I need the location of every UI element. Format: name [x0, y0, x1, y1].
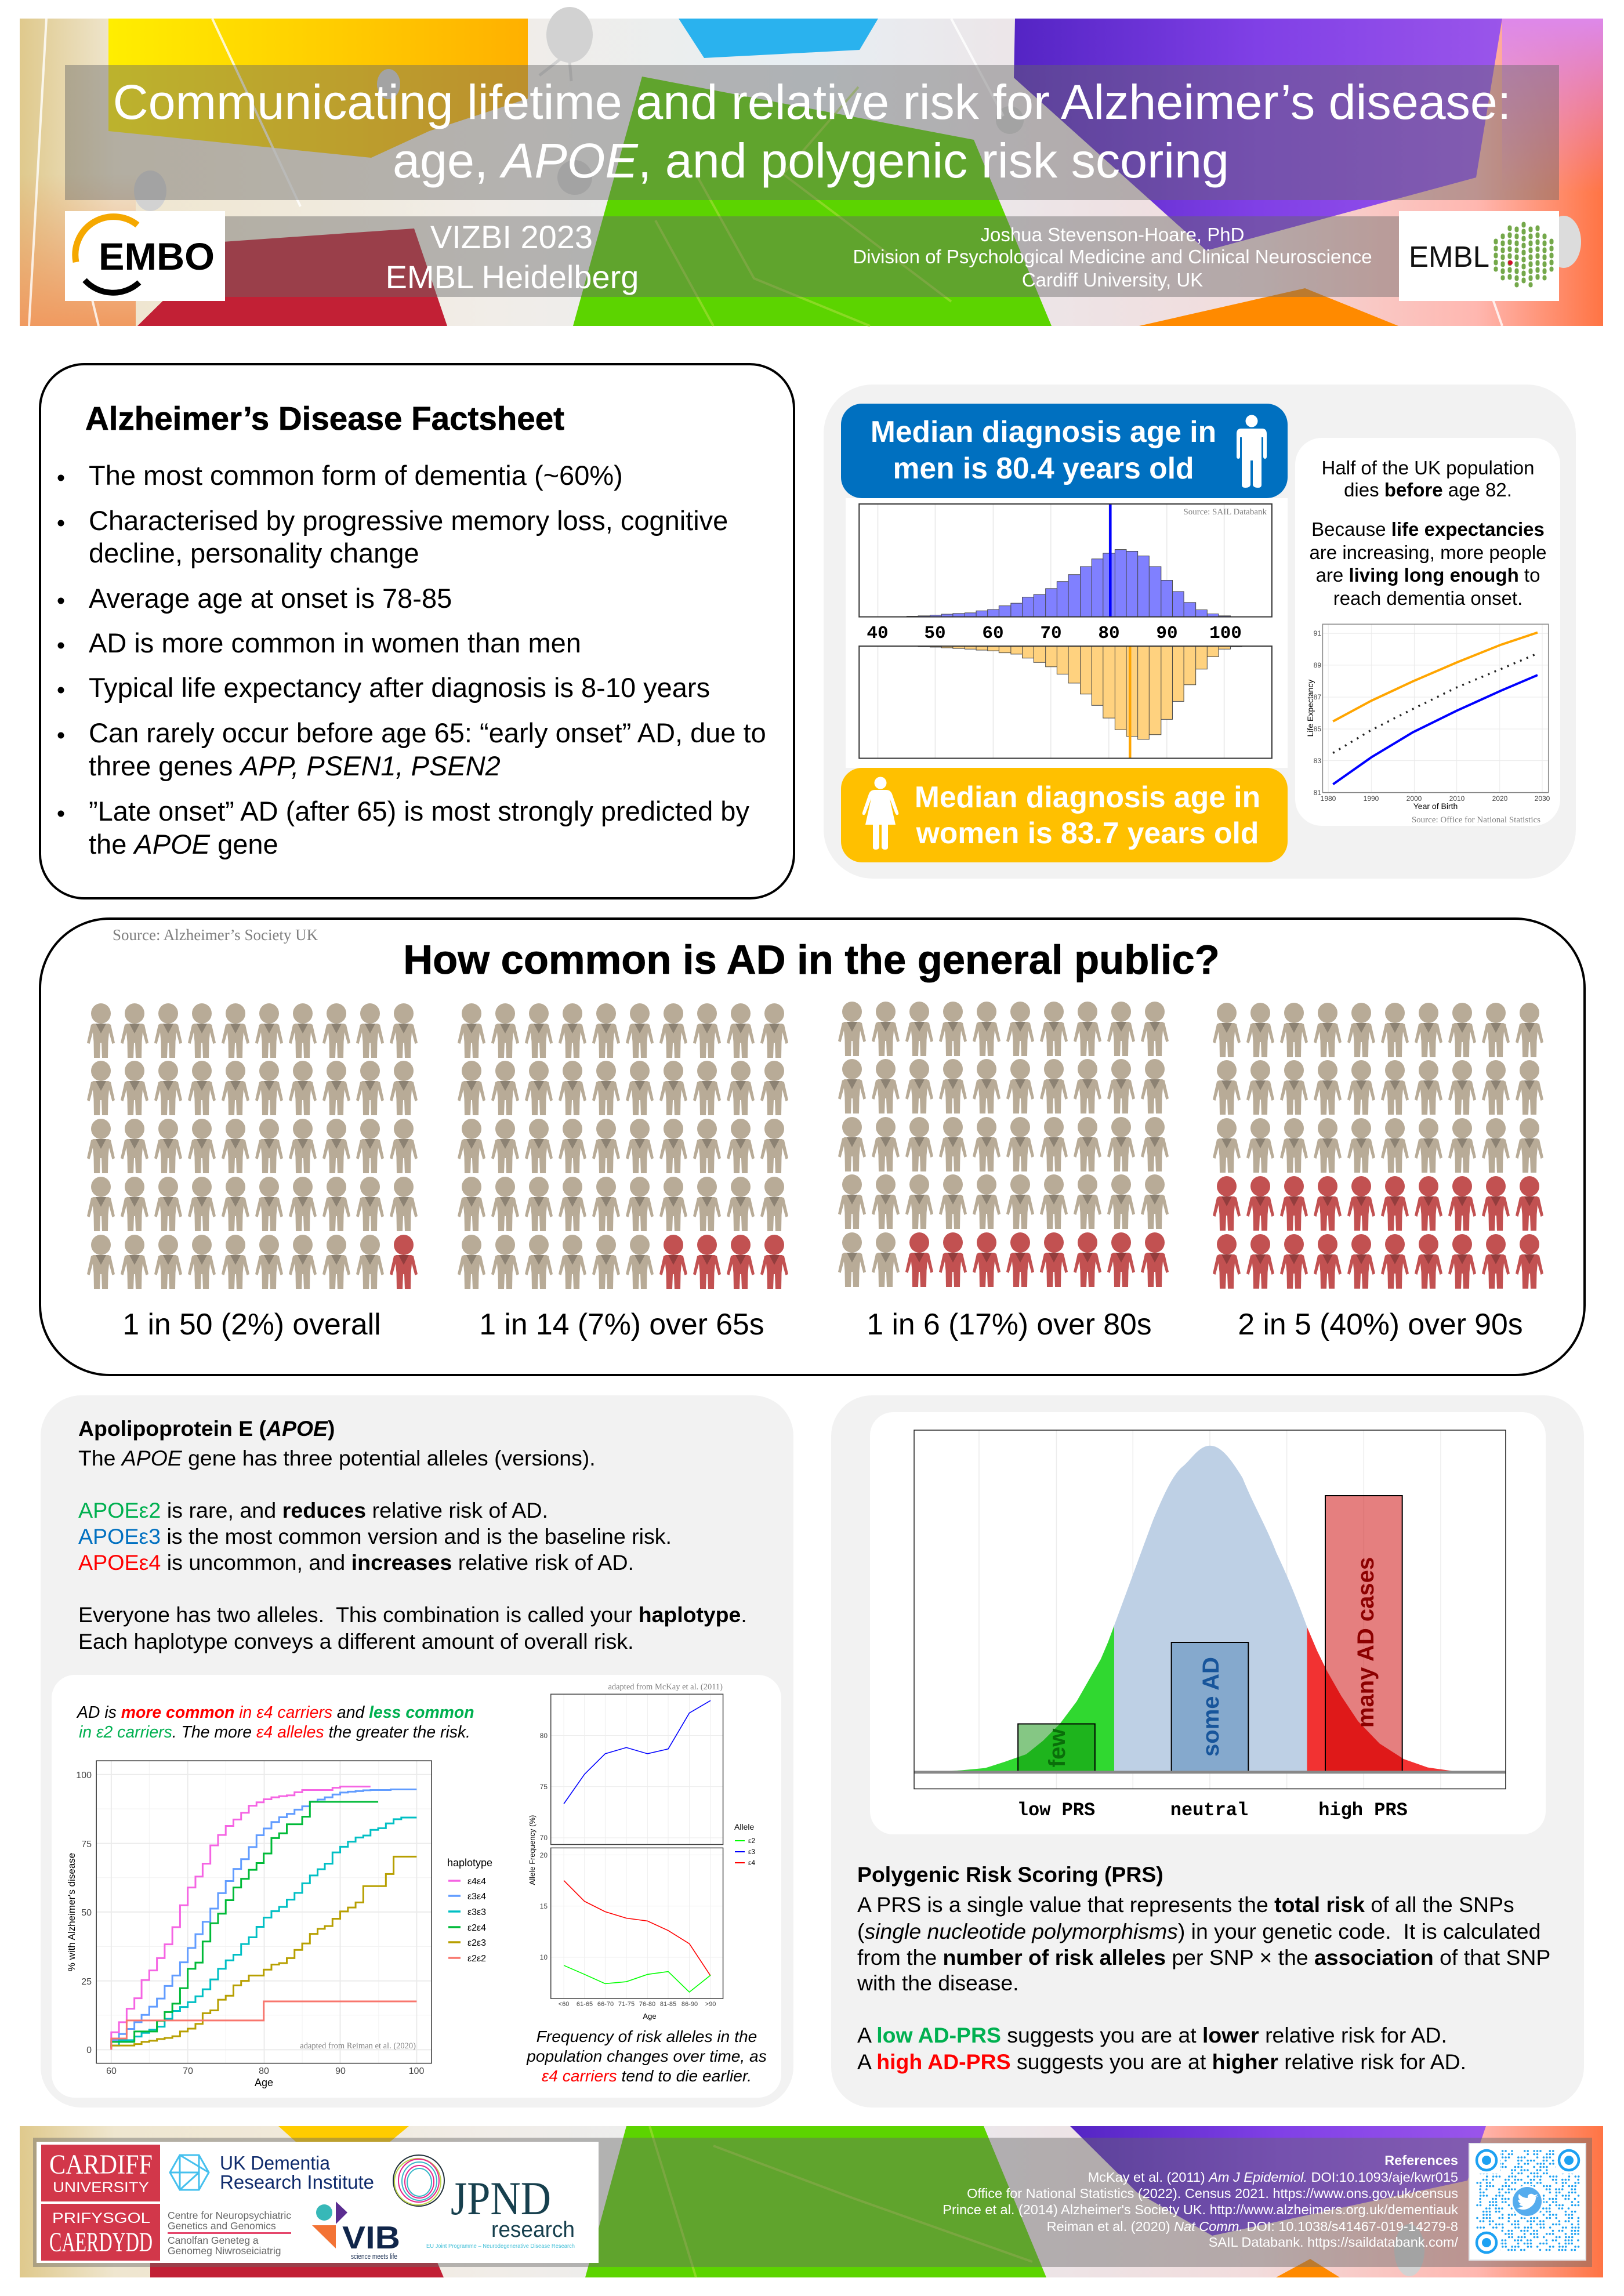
chart: PRS distribution: neutral	[1170, 1800, 1248, 1821]
chart caption	[526, 2027, 767, 2085]
chart lead text: in ε2 carriers. The more ε4 alleles the greater the risk.	[79, 1723, 470, 1742]
title band	[65, 65, 1559, 200]
APOE explanation text: APOEε4 is uncommon, and increases relative risk of AD.	[78, 1550, 634, 1575]
logo: EMBL	[1399, 211, 1559, 301]
chart: life expectancy by year of birth: 2030	[1535, 795, 1550, 803]
header background artwork	[20, 7, 1603, 326]
callout: women: women is 83.7 years old	[916, 816, 1259, 850]
references: McKay et al. (2011) Am J Epidemiol. DOI:10.1093/aje/kwr015	[1088, 2170, 1458, 2185]
factsheet bullet list	[58, 460, 766, 859]
QR code with Twitter logo	[1469, 2143, 1586, 2260]
logo: Centre for Neuropsychiatric Genetics	[168, 2210, 291, 2257]
factsheet bullet list: AD is more common in women than men	[89, 627, 581, 658]
APOE explanation text: Everyone has two alleles. This combination is called your haplotype.	[78, 1602, 747, 1627]
footer background artwork	[20, 2126, 1603, 2277]
logo: JPND research: JPND	[451, 2172, 551, 2225]
chart: life expectancy by year of birth: 1990	[1364, 795, 1379, 803]
callout: men	[841, 404, 1288, 498]
age axis labels: 100	[1209, 623, 1242, 644]
chart: cumulative AD by haplotype: 100	[409, 2066, 424, 2076]
legend: haplotype: ε2ε4	[467, 1923, 486, 1933]
chart: PRS distribution	[914, 1430, 1506, 1821]
age axis labels: 90	[1156, 623, 1178, 644]
footer banner	[20, 2126, 1603, 2277]
references: References	[1384, 2153, 1458, 2168]
chart: allele frequency by age: 20	[540, 1851, 548, 1859]
chart: allele frequency by age: 76-80	[639, 2001, 655, 2008]
PRS explanation text: from the number of risk alleles per SNP × the association of that SNP	[857, 1945, 1550, 1969]
factsheet bullet list: Average age at onset is 78-85	[89, 583, 452, 614]
logo: UK Dementia Research Institute	[170, 2152, 374, 2193]
logo: Centre for Neuropsychiatric Genetics: Genomeg Niwroseiciatrig	[168, 2245, 281, 2257]
chart lead text	[76, 1703, 474, 1742]
age axis labels: 80	[1098, 623, 1120, 644]
subtitle band	[65, 216, 1559, 297]
chart: life expectancy by year of birth: 1980	[1321, 795, 1336, 803]
title: Communicating lifetime and relative risk for Alzheimer’s disease:	[113, 75, 1511, 129]
white chart card	[870, 1412, 1546, 1834]
panel: life expectancy	[1295, 438, 1560, 826]
legend: allele: Allele	[734, 1822, 754, 1831]
references: Office for National Statistics (2022). Census 2021. https://www.ons.gov.uk/census	[967, 2186, 1458, 2201]
chart: cumulative AD by haplotype: 100	[76, 1771, 92, 1780]
legend: haplotype: ε3ε4	[467, 1892, 486, 1902]
logos panel	[37, 2142, 599, 2263]
PRS explanation text: with the disease.	[857, 1971, 1019, 1995]
chart: allele frequency by age: 15	[540, 1902, 548, 1910]
logo: Cardiff University: CARDIFF	[49, 2149, 153, 2180]
references: Prince et al. (2014) Alzheimer's Society UK. http://www.alzheimers.org.uk/dementiauk	[942, 2202, 1458, 2217]
logo: Cardiff University: PRIFYSGOL	[52, 2210, 150, 2226]
panel: APOE	[41, 1395, 793, 2108]
chart: female diagnosis histogram	[859, 646, 1272, 759]
panel: factsheet	[40, 364, 794, 898]
PRS explanation text	[857, 1862, 1550, 2074]
chart: allele frequency by age: Age	[643, 2012, 657, 2021]
factsheet heading: Alzheimer’s Disease Factsheet	[85, 400, 564, 437]
PRS explanation text: (single nucleotide polymorphisms) in your genetic code. It is calculated	[857, 1919, 1540, 1943]
legend: haplotype: ε2ε3	[467, 1938, 486, 1948]
legend: haplotype: ε4ε4	[467, 1877, 486, 1887]
panel box	[40, 919, 1585, 1375]
pictogram: 1 in 50 overall	[87, 1003, 418, 1289]
APOE explanation text: The APOE gene has three potential alleles (versions).	[78, 1446, 596, 1470]
PRS explanation text: A PRS is a single value that represents the total risk of all the SNPs	[857, 1892, 1514, 1917]
factsheet bullet list: decline, personality change	[89, 538, 419, 568]
chart: life expectancy by year of birth: 2010	[1449, 795, 1465, 803]
references	[942, 2153, 1458, 2250]
source: McKay: adapted from McKay et al. (2011)	[608, 1682, 723, 1692]
APOE explanation text	[78, 1416, 747, 1653]
histogram white backing	[846, 498, 1288, 768]
APOE explanation text: APOEε3 is the most common version and is the baseline risk.	[78, 1524, 672, 1548]
logo: JPND research	[393, 2155, 575, 2250]
chart: allele frequency by age: 70	[540, 1834, 548, 1842]
chart: PRS distribution: some AD	[1198, 1657, 1224, 1757]
chart: life expectancy by year of birth: Year of Birth	[1413, 801, 1458, 811]
callout: women	[841, 768, 1288, 862]
logo: UK Dementia Research Institute: Research Institute	[220, 2171, 374, 2193]
logo: VIB: science meets life	[351, 2253, 397, 2261]
factsheet bullet list: Typical life expectancy after diagnosis is 8-10 years	[89, 672, 710, 703]
chart caption: ε4 carriers tend to die earlier.	[542, 2066, 752, 2085]
legend: allele: ε3	[748, 1848, 755, 1856]
chart: allele frequency by age: 10	[540, 1953, 548, 1961]
life expectancy text: are living long enough to	[1316, 564, 1540, 586]
factsheet bullet list: Characterised by progressive memory loss, cognitive	[89, 505, 728, 536]
factsheet box	[40, 364, 794, 898]
pictogram captions: 1 in 14 (7%) over 65s	[479, 1307, 764, 1341]
chart: PRS distribution: few	[1045, 1728, 1070, 1767]
author text: Division of Psychological Medicine and Clinical Neuroscience	[853, 246, 1372, 267]
chart: allele frequency by age: 75	[540, 1783, 548, 1791]
life expectancy text: dies before age 82.	[1344, 479, 1512, 500]
life expectancy text: Because life expectancies	[1311, 518, 1545, 540]
logo: Cardiff University: CAERDYDD	[49, 2227, 153, 2258]
life expectancy text: reach dementia onset.	[1333, 587, 1522, 609]
chart: life expectancy by year of birth	[1306, 624, 1550, 811]
callout: men: Median diagnosis age in	[871, 415, 1216, 448]
pictogram: 1 in 6 over 80s	[838, 1002, 1169, 1287]
logo: Centre for Neuropsychiatric Genetics: Canolfan Geneteg a	[168, 2235, 259, 2246]
footer band	[33, 2138, 1592, 2267]
logo: JPND research: EU Joint Programme – Neurodegenerative Disease Research	[426, 2243, 575, 2250]
chart: life expectancy by year of birth: 89	[1314, 661, 1321, 669]
legend: haplotype: ε3ε3	[467, 1907, 486, 1917]
pictogram: 1 in 14 over 65s	[458, 1003, 788, 1289]
chart: cumulative AD by haplotype: 25	[81, 1977, 92, 1987]
chart: allele frequency by age: 86-90	[682, 2001, 698, 2008]
logo: Centre for Neuropsychiatric Genetics: Genetics and Genomics	[168, 2220, 276, 2232]
legend: haplotype: haplotype	[447, 1857, 492, 1869]
source: Reiman: adapted from Reiman et al. (2020)	[300, 2041, 416, 2051]
logo: UK Dementia Research Institute: UK Dementia	[220, 2152, 331, 2174]
logo: Cardiff University	[41, 2145, 160, 2261]
chart: allele frequency by age: 71-75	[618, 2001, 635, 2008]
conference text	[386, 219, 639, 295]
chart: cumulative AD by haplotype: 90	[335, 2066, 346, 2076]
chart: allele frequency by age: 80	[540, 1732, 548, 1740]
chart: cumulative AD by haplotype: 0	[86, 2045, 92, 2055]
chart: cumulative AD by haplotype: 70	[183, 2066, 193, 2076]
logo: VIB: VIB	[342, 2219, 400, 2255]
chart: PRS distribution: low PRS	[1017, 1800, 1095, 1821]
legend: allele	[734, 1822, 755, 1867]
conference text: EMBL Heidelberg	[386, 259, 639, 295]
callout: women: Median diagnosis age in	[915, 780, 1260, 814]
panel: PRS	[831, 1395, 1584, 2108]
age axis labels: 40	[867, 623, 889, 644]
callout: men: men is 80.4 years old	[893, 451, 1194, 485]
pictogram: 2 in 5 over 90s	[1213, 1003, 1543, 1289]
logo: Cardiff University: UNIVERSITY	[53, 2179, 149, 2196]
chart: allele frequency by age: 61-65	[577, 2001, 593, 2008]
source: SAIL: Source: SAIL Databank	[1183, 507, 1267, 517]
APOE explanation text: Each haplotype conveys a different amount of overall risk.	[78, 1629, 633, 1653]
factsheet bullet list: ”Late onset” AD (after 65) is most strongly predicted by	[89, 796, 749, 826]
PRS explanation text: Polygenic Risk Scoring (PRS)	[857, 1862, 1163, 1887]
factsheet bullet list: the APOE gene	[89, 829, 278, 859]
chart: life expectancy by year of birth: 83	[1314, 757, 1321, 765]
icon: woman	[862, 777, 898, 850]
chart lead text: AD is more common in ε4 carriers and less common	[76, 1703, 474, 1722]
heading: How common is AD in the general public?	[403, 937, 1220, 982]
conference text: VIZBI 2023	[430, 219, 593, 255]
chart: cumulative AD by haplotype: % with Alzheimer's disease	[66, 1853, 77, 1971]
chart: allele frequency by age: <60	[559, 2001, 569, 2008]
logo: Centre for Neuropsychiatric Genetics: Centre for Neuropsychiatric	[168, 2210, 291, 2221]
author text	[853, 224, 1372, 291]
chart: cumulative AD by haplotype	[66, 1761, 492, 2088]
chart: allele frequency by age: >90	[705, 2001, 716, 2008]
chart: cumulative AD by haplotype: 50	[81, 1908, 92, 1918]
chart: allele frequency by age: 81-85	[660, 2001, 676, 2008]
pictogram captions: 1 in 50 (2%) overall	[122, 1307, 381, 1341]
chart: cumulative AD by haplotype: 75	[81, 1840, 92, 1849]
logo: VIB	[312, 2201, 400, 2261]
icon: man	[1237, 415, 1267, 488]
chart caption: Frequency of risk alleles in the	[536, 2027, 757, 2045]
APOE explanation text: Apolipoprotein E (APOE)	[78, 1416, 335, 1441]
chart: PRS distribution: high PRS	[1318, 1800, 1408, 1821]
logo: JPND research: research	[491, 2218, 575, 2242]
factsheet bullet list: The most common form of dementia (~60%)	[89, 460, 623, 491]
age axis labels	[867, 623, 1242, 644]
chart: PRS distribution: many AD cases	[1353, 1557, 1379, 1728]
life expectancy text: Half of the UK population	[1322, 457, 1534, 478]
author text: Cardiff University, UK	[1022, 269, 1203, 291]
chart: life expectancy by year of birth: Life Expectancy	[1306, 680, 1315, 737]
chart: life expectancy by year of birth: 87	[1314, 693, 1321, 701]
age axis labels: 60	[982, 623, 1004, 644]
PRS explanation text: A high AD-PRS suggests you are at higher relative risk for AD.	[857, 2050, 1466, 2074]
references: SAIL Databank. https://saildatabank.com/	[1209, 2235, 1458, 2250]
source: Alzheimer's Society: Source: Alzheimer’s Society UK	[113, 926, 318, 944]
life expectancy text	[1309, 457, 1547, 609]
author text: Joshua Stevenson-Hoare, PhD	[981, 224, 1244, 245]
logo: EMBO: EMBO	[99, 235, 215, 278]
APOE explanation text: APOEε2 is rare, and reduces relative risk of AD.	[78, 1498, 548, 1522]
factsheet bullet list: Can rarely occur before age 65: “early onset” AD, due to	[89, 717, 766, 748]
chart: life expectancy by year of birth: 91	[1314, 629, 1321, 637]
references: Reiman et al. (2020) Nat Comm. DOI: 10.1038/s41467-019-14279-8	[1047, 2219, 1458, 2234]
PRS explanation text: A low AD-PRS suggests you are at lower relative risk for AD.	[857, 2023, 1447, 2047]
legend: haplotype	[447, 1857, 492, 1964]
chart: allele frequency by age	[528, 1694, 755, 2021]
chart: male diagnosis histogram	[859, 504, 1272, 617]
grey panel background	[831, 1395, 1584, 2108]
life expectancy text: are increasing, more people	[1309, 542, 1547, 563]
chart: life expectancy by year of birth: 2020	[1492, 795, 1508, 803]
pictogram captions: 1 in 6 (17%) over 80s	[867, 1307, 1152, 1341]
pictogram captions	[122, 1307, 1523, 1341]
grey panel background	[824, 385, 1576, 879]
age axis labels: 70	[1040, 623, 1062, 644]
pictogram captions: 2 in 5 (40%) over 90s	[1238, 1307, 1523, 1341]
header banner	[20, 7, 1603, 326]
logo: EMBL: EMBL	[1409, 240, 1489, 273]
legend: haplotype: ε2ε2	[467, 1954, 486, 1964]
legend: allele: ε2	[748, 1837, 755, 1845]
chart: cumulative AD by haplotype: 80	[259, 2066, 269, 2076]
chart: life expectancy by year of birth: 85	[1314, 725, 1321, 733]
age axis labels: 50	[924, 623, 946, 644]
chart: allele frequency by age: Allele Frequency (%)	[528, 1815, 536, 1885]
source: ONS: Source: Office for National Statistics	[1412, 815, 1540, 825]
chart: cumulative AD by haplotype: 60	[106, 2066, 117, 2076]
factsheet bullet list: three genes APP, PSEN1, PSEN2	[89, 750, 501, 781]
chart caption: population changes over time, as	[526, 2047, 767, 2065]
title	[113, 75, 1511, 188]
chart: life expectancy by year of birth: 2000	[1406, 795, 1422, 803]
chart: cumulative AD by haplotype: Age	[255, 2077, 273, 2088]
panel: how common is AD	[40, 919, 1585, 1375]
white chart card	[52, 1675, 781, 2098]
logo: EMBO	[65, 211, 225, 301]
grey panel background	[41, 1395, 793, 2108]
legend: allele: ε4	[748, 1859, 755, 1867]
panel: median diagnosis age	[824, 385, 1576, 879]
chart: life expectancy by year of birth: 81	[1314, 789, 1321, 797]
chart: allele frequency by age: 66-70	[597, 2001, 614, 2008]
title: age, APOE, and polygenic risk scoring	[393, 133, 1229, 188]
